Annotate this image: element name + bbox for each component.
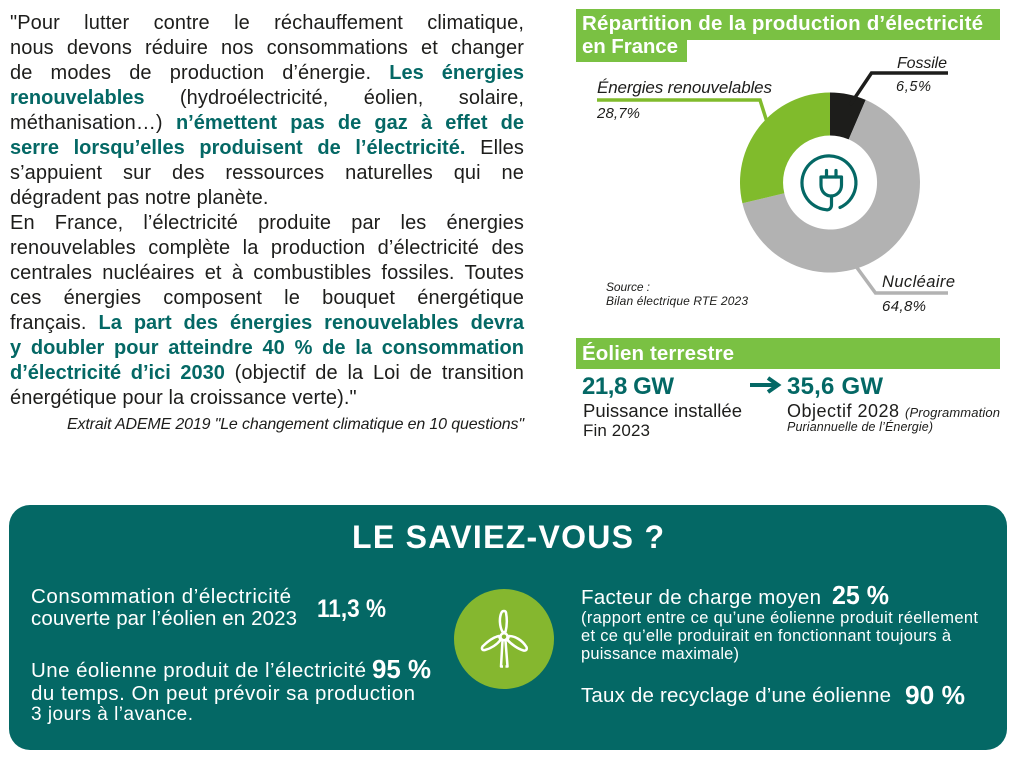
source citation: Extrait ADEME 2019 "Le changement climatique en 10 questions" <box>67 416 525 433</box>
text block: introduction quote: méthanisation…) n’émettent pas de gaz à effet de <box>10 112 524 134</box>
text block: introduction quote: dégradent pas notre planète. <box>10 187 269 209</box>
chart source: Source : <box>606 280 650 294</box>
heading: onshore wind <box>576 338 1000 369</box>
heading: did you know: LE SAVIEZ-VOUS ? <box>352 519 664 555</box>
label: nuclear <box>855 265 955 315</box>
stat: 2028 target: Objectif 2028 <box>787 401 899 421</box>
text block: introduction quote: centrales nucléaires et à combustibles fossiles. Toutes <box>10 262 524 284</box>
stat: installed capacity <box>582 373 742 440</box>
label: nuclear: Nucléaire <box>882 273 955 291</box>
stat: wind share: couverte par l’éolien en 2023 <box>31 607 297 630</box>
icon: wind turbine <box>454 589 554 689</box>
text block: introduction quote: renouvelables complète la production d’électricité des <box>10 237 524 259</box>
stat: production time: 3 jours à l’avance. <box>31 704 193 725</box>
text block: introduction quote: énergétique pour la croissance verte)." <box>10 387 357 409</box>
label: fossil <box>850 55 948 105</box>
label: renewables: 28,7% <box>596 105 640 122</box>
stat: load factor: (rapport entre ce qu’une éolienne produit réellement <box>581 609 978 627</box>
text block: introduction quote: En France, l’électricité produite par les énergies <box>10 212 524 234</box>
chart source <box>606 280 748 308</box>
chart source: Bilan électrique RTE 2023 <box>606 294 748 308</box>
stat: installed capacity: 21,8 GW <box>582 373 674 400</box>
panel: onshore wind <box>576 338 1000 440</box>
text block: introduction quote: nous devons réduire nos consommations et changer <box>10 37 524 59</box>
text block: introduction quote <box>10 12 524 409</box>
text block: introduction quote: français. La part des énergies renouvelables devra <box>10 312 524 334</box>
panel: did you know <box>9 505 1007 750</box>
text block: introduction quote: d’électricité d’ici 2030 (objectif de la Loi de transition <box>10 362 524 384</box>
stat: installed capacity: Fin 2023 <box>583 421 650 440</box>
stat: recycling rate <box>581 680 965 710</box>
stat: wind share: Consommation d’électricité <box>31 585 291 608</box>
text block: introduction quote: renouvelables (hydroélectricité, éolien, solaire, <box>10 87 524 109</box>
arrow <box>750 378 778 392</box>
stat: production time: Une éolienne produit de l’électricité <box>31 659 366 682</box>
stat: 2028 target <box>787 373 1000 434</box>
heading: electricity production: Répartition de la production d’électricité <box>582 12 983 35</box>
stat: production time: du temps. On peut prévoir sa production <box>31 682 415 705</box>
stat: installed capacity: Puissance installée <box>583 400 742 421</box>
stat: load factor: puissance maximale) <box>581 645 739 663</box>
text block: introduction quote: serre lorsqu’elles produisent de l’électricité. Elles <box>10 137 524 159</box>
stat: wind share: 11,3 % <box>317 595 386 623</box>
text block: introduction quote: s’appuient sur des ressources naturelles qui ne <box>10 162 524 184</box>
text block: introduction quote: y doubler pour atteindre 40 % de la consommation <box>10 337 524 359</box>
label: renewables: Énergies renouvelables <box>597 78 772 97</box>
label: fossil: Fossile <box>897 55 947 72</box>
stat: wind share <box>31 585 386 630</box>
stat: recycling rate: Taux de recyclage d’une éolienne <box>581 684 891 707</box>
stat: 2028 target: Puriannuelle de l’Énergie) <box>787 419 933 434</box>
panel: electricity production chart <box>576 9 1000 315</box>
stat: load factor: Facteur de charge moyen <box>581 586 821 609</box>
text block: introduction quote: de modes de production d’énergie. Les énergies <box>10 62 524 84</box>
text block: introduction quote: ces énergies composent le bouquet énergétique <box>10 287 524 309</box>
label: renewables <box>596 78 772 122</box>
stat: 2028 target: (Programmation <box>905 405 1000 420</box>
stat: load factor <box>581 580 978 663</box>
stat: 2028 target: 35,6 GW <box>787 373 883 400</box>
text block: introduction quote: "Pour lutter contre le réchauffement climatique, <box>10 12 524 34</box>
heading: electricity production <box>576 9 1000 62</box>
stat: load factor: et ce qu’elle produirait en fonctionnant toujours à <box>581 627 952 645</box>
label: fossil: 6,5% <box>896 79 931 95</box>
icon: electric plug <box>802 156 856 210</box>
stat: recycling rate: 90 % <box>905 680 965 710</box>
stat: load factor: 25 % <box>832 580 889 610</box>
heading: onshore wind: Éolien terrestre <box>582 342 734 365</box>
stat: production time: 95 % <box>372 654 431 684</box>
stat: production time <box>31 654 431 725</box>
heading: electricity production: en France <box>582 35 678 58</box>
label: nuclear: 64,8% <box>882 298 926 315</box>
donut chart <box>740 92 920 273</box>
